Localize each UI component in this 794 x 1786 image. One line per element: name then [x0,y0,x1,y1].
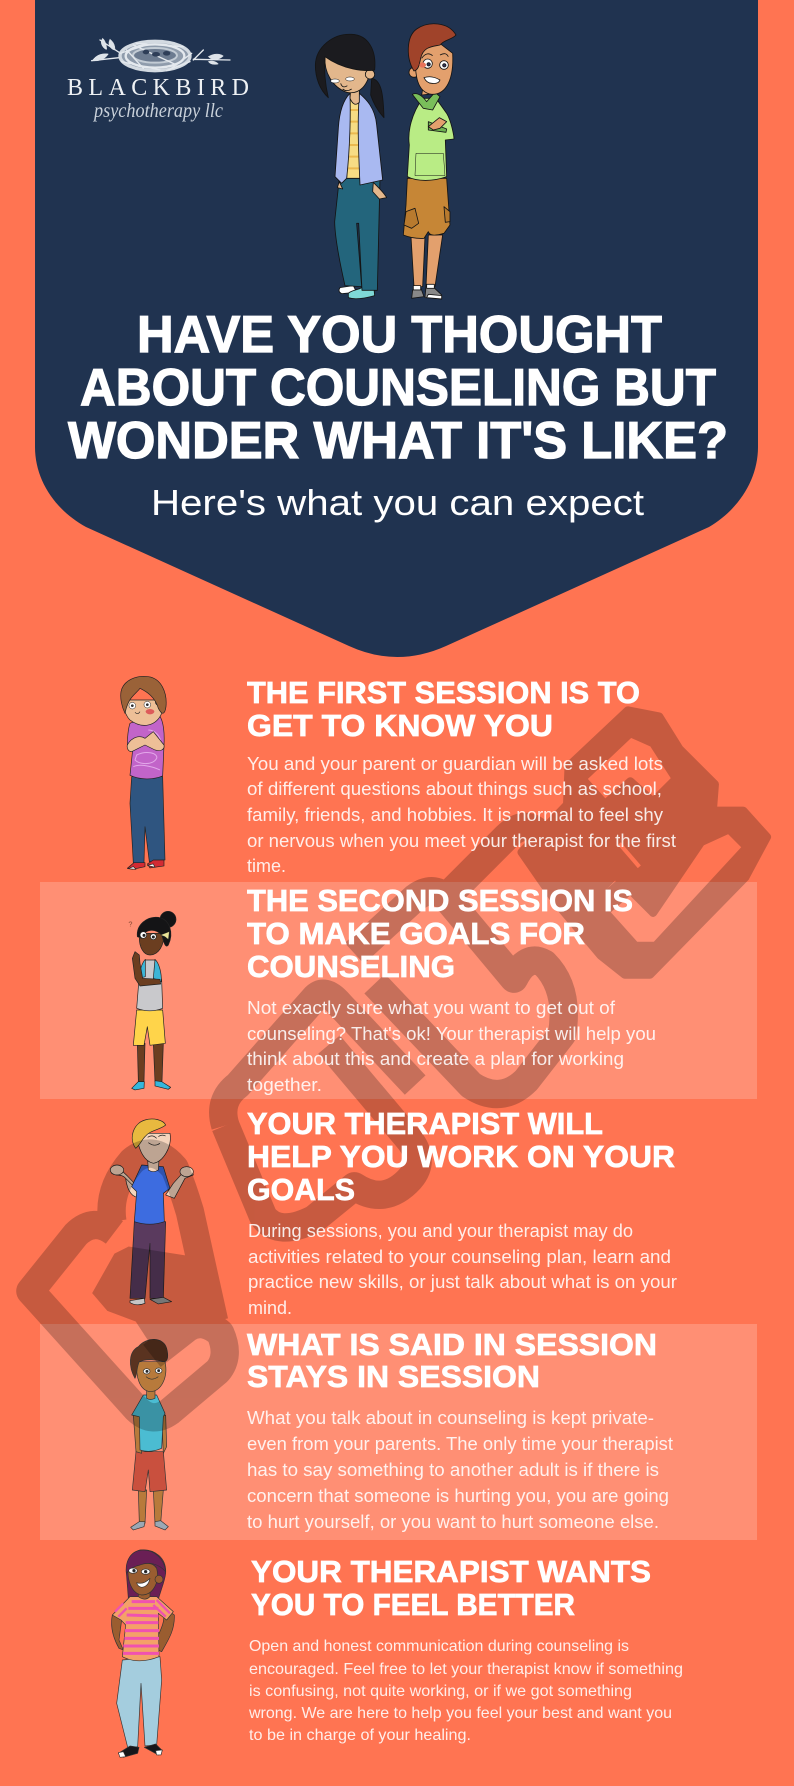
body text: family, friends, and hobbies. It is normal to feel shy [247,804,664,825]
illustration: thinking child [128,911,176,1090]
heading [247,1106,675,1207]
body text: wrong. We are here to help you feel your best and want you [248,1705,672,1722]
heading: WHAT IS SAID IN SESSION [247,1327,657,1362]
section: feeling better [248,1554,683,1744]
body text: Not exactly sure what you want to get out of [247,997,616,1018]
heading: YOU TO FEEL BETTER [251,1587,575,1622]
body text: You and your parent or guardian will be asked lots [247,753,663,774]
body text: time. [247,855,286,876]
body text: What you talk about in counseling is kept private- [247,1407,654,1428]
illustration: confident child [112,1550,174,1757]
heading: STAYS IN SESSION [247,1359,540,1394]
heading: HELP YOU WORK ON YOUR [247,1139,675,1174]
illustration: thinking child: ? [128,920,132,929]
heading [247,675,640,743]
heading: THE SECOND SESSION IS [247,883,633,918]
heading: YOUR THERAPIST WANTS [251,1554,651,1589]
body text: practice new skills, or just talk about what is on your [248,1271,677,1292]
heading: COUNSELING [247,949,455,984]
logo [67,38,249,122]
illustration: smiling child [130,1339,168,1530]
body text: to hurt yourself, or you want to hurt someone else. [247,1511,659,1532]
illustration: worried boy [403,24,456,299]
title [68,306,728,470]
section: working on goals [247,1106,677,1318]
section: first session [247,675,676,876]
body text [247,997,656,1095]
body text: even from your parents. The only time your therapist [247,1433,673,1454]
heading: YOUR THERAPIST WILL [247,1106,603,1141]
body text: has to say something to another adult is if there is [247,1459,659,1480]
body text: Open and honest communication during counseling is [249,1638,629,1655]
body text [247,753,676,876]
body text: During sessions, you and your therapist may do [248,1220,633,1241]
body text: counseling? That's ok! Your therapist will help you [247,1023,656,1044]
body text: encouraged. Feel free to let your therapist know if something [249,1661,683,1678]
heading: GET TO KNOW YOU [247,708,553,743]
heading: THE FIRST SESSION IS TO [247,675,640,710]
section: second session [247,883,656,1095]
title: WONDER WHAT IT'S LIKE? [68,412,728,470]
heading [251,1554,651,1622]
heading [247,883,633,984]
title: ABOUT COUNSELING BUT [80,359,716,417]
watermark stamp [30,710,767,1417]
highlight band: second session [40,882,757,1099]
heading: TO MAKE GOALS FOR [247,916,585,951]
body text: is confusing, not quite working, or if we got something [249,1683,632,1700]
body text [247,1407,673,1532]
body text [248,1638,683,1744]
illustration: calm child [110,1119,193,1305]
body text: to be in charge of your healing. [249,1727,471,1744]
header banner [35,0,758,657]
body text: activities related to your counseling plan, learn and [248,1246,671,1267]
logo wordmark: BLACKBIRD [67,75,249,101]
logo tagline: psychotherapy llc [92,100,223,122]
illustration: shy child [121,676,166,869]
subtitle: Here's what you can expect [151,482,644,523]
body text: together. [247,1074,322,1095]
illustration: sad girl [315,34,387,299]
icon: nest [92,38,230,71]
heading [247,1327,657,1394]
title: HAVE YOU THOUGHT [137,306,662,364]
highlight band: confidentiality [40,1324,757,1540]
body text: of different questions about things such as school, [247,778,662,799]
section: confidentiality [247,1327,673,1532]
heading: GOALS [247,1172,355,1207]
body text [248,1220,677,1318]
body text: think about this and create a plan for working [247,1048,624,1069]
body text: concern that someone is hurting you, you are going [247,1485,669,1506]
body text: or nervous when you meet your therapist for the first [247,830,676,851]
body text: mind. [248,1297,292,1318]
